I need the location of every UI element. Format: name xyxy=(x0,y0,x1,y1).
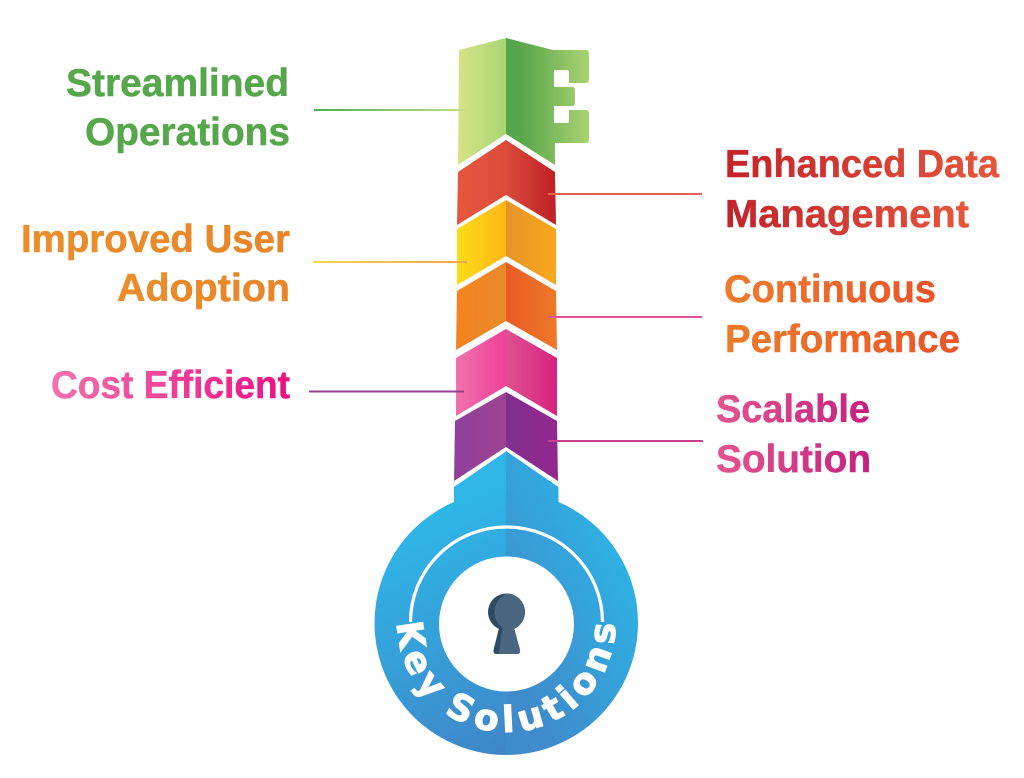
connector: cost efficient xyxy=(309,390,464,392)
key bow circle and neck xyxy=(375,451,638,755)
connector: scalable solution xyxy=(548,440,703,442)
label: improved user adoption: Adoption xyxy=(117,267,290,310)
label: streamlined operations: Streamlined xyxy=(66,62,289,105)
segment: yellow xyxy=(457,200,556,285)
label: enhanced data management: Management xyxy=(725,193,969,236)
label: continuous performance xyxy=(724,268,960,361)
white centre circle xyxy=(439,556,574,692)
label: streamlined operations xyxy=(66,62,290,154)
connector: streamlined operations xyxy=(314,109,467,111)
label: enhanced data management: Enhanced Data xyxy=(725,143,1000,186)
segment: red xyxy=(457,140,556,225)
key head xyxy=(374,451,638,755)
segment: pink xyxy=(456,329,557,416)
connector: improved user adoption xyxy=(313,261,467,263)
label: scalable solution: Solution xyxy=(716,438,871,481)
label: streamlined operations: Operations xyxy=(85,111,290,154)
connector: continuous performance xyxy=(548,316,702,318)
white arc xyxy=(410,527,602,622)
connector: enhanced data management xyxy=(548,193,702,195)
label: enhanced data management xyxy=(725,143,1000,236)
icon: keyhole xyxy=(488,594,525,654)
label: scalable solution: Scalable xyxy=(716,388,870,431)
label: improved user adoption xyxy=(21,218,290,310)
label: continuous performance: Performance xyxy=(725,318,960,361)
segment: purple xyxy=(454,392,558,481)
label: scalable solution xyxy=(716,388,871,481)
segment: orange xyxy=(456,262,557,350)
curved title: Key Solutions xyxy=(396,622,616,733)
segment: green key blade xyxy=(458,38,589,165)
label: continuous performance: Continuous xyxy=(724,268,936,311)
label: cost efficient: Cost Efficient xyxy=(51,364,290,407)
label: improved user adoption: Improved User xyxy=(21,218,290,261)
